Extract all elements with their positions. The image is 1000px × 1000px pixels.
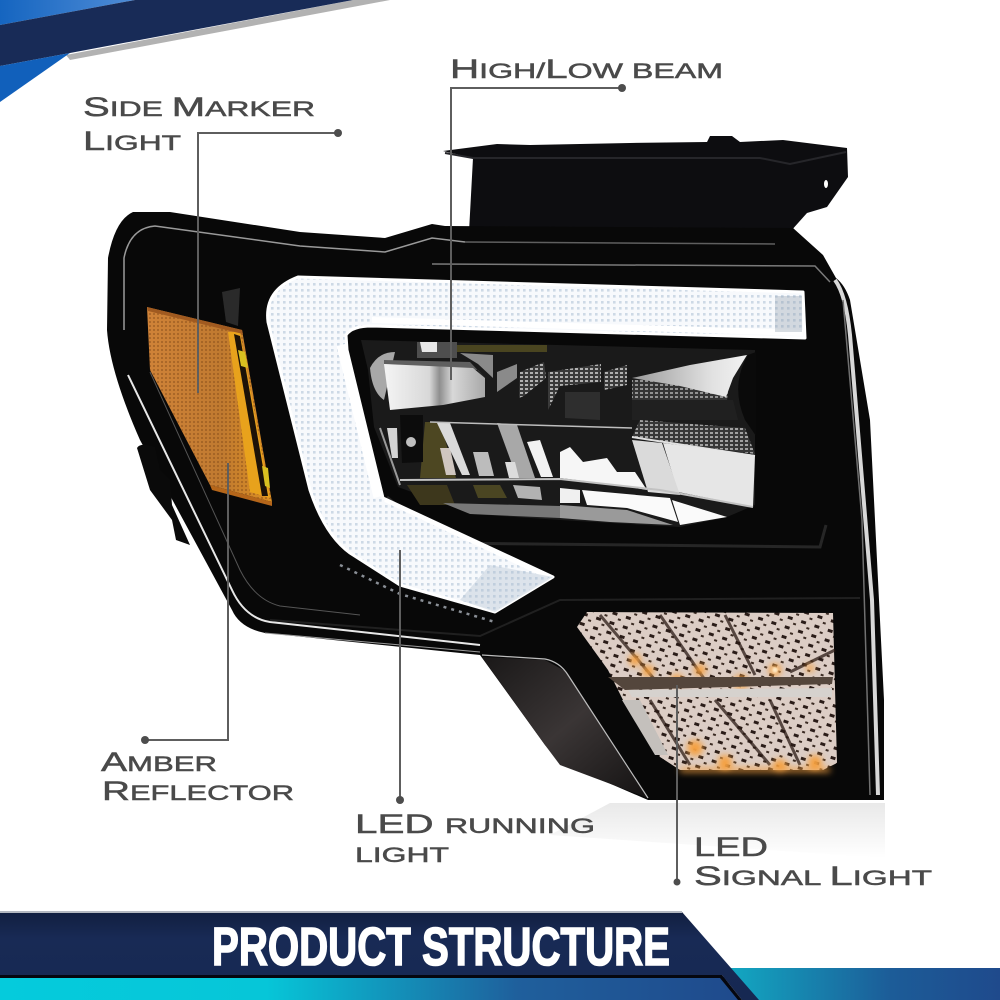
bottom banner xyxy=(0,911,1000,1000)
label: High/Low beam: H IGH/ L OW BEAM xyxy=(450,54,723,84)
callout line: LED signal light xyxy=(674,685,680,886)
amber LED glow xyxy=(629,654,830,773)
olive backdrop strips xyxy=(457,345,547,352)
high and low beam chrome reflector xyxy=(361,340,756,527)
LED running light strip xyxy=(268,277,805,622)
top-left corner ribbon xyxy=(0,0,390,102)
banner title: PRODUCT STRUCTURE xyxy=(212,917,670,977)
floor reflection xyxy=(550,803,885,858)
lower black lip xyxy=(482,657,648,798)
label: Amber Reflector: A MBER xyxy=(101,747,217,777)
callout line: amber reflector xyxy=(141,463,228,744)
label: LED running light xyxy=(355,809,595,867)
upper mid reflector arcs xyxy=(497,364,517,392)
label: Amber Reflector: R EFLECTOR xyxy=(102,776,294,806)
banner right band xyxy=(728,968,1000,1000)
callout line: LED running light xyxy=(396,550,404,804)
label: LED running light: LIGHT xyxy=(355,843,449,867)
amber reflector xyxy=(147,288,272,506)
mounting tabs xyxy=(137,445,190,545)
callout line: high and low beam xyxy=(451,84,626,380)
lower reflector strips xyxy=(663,443,755,507)
label: LED Signal Light: S IGNAL L IGHT xyxy=(694,861,932,891)
label: Side Marker Light: L IGHT xyxy=(83,126,181,156)
centre chrome bar xyxy=(608,677,833,690)
callout line: side marker light xyxy=(198,129,342,393)
banner navy band xyxy=(0,912,759,1000)
mounting bracket xyxy=(443,136,848,232)
projector housing xyxy=(370,352,395,400)
upper right reflector xyxy=(632,378,730,402)
label: LED running light: LED RUNNING xyxy=(355,809,595,839)
lamp housing xyxy=(107,212,884,800)
banner lower gradient band xyxy=(0,977,740,1000)
label: LED Signal Light: LED xyxy=(694,832,768,862)
clear lens edge highlights xyxy=(124,226,878,795)
label: Side Marker Light: S IDE M ARKER xyxy=(83,92,315,122)
label: Side Marker Light xyxy=(83,92,315,156)
label: Amber Reflector xyxy=(101,747,294,806)
LED signal light xyxy=(577,612,837,773)
headlight product photo xyxy=(107,136,884,800)
label: LED Signal Light xyxy=(694,832,932,891)
